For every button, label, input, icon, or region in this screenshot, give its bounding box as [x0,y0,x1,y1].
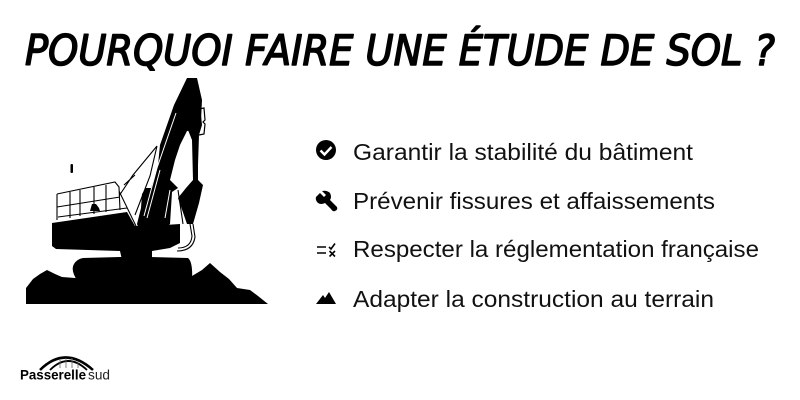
boom [137,78,202,232]
logo: Passerelle sud [20,358,110,382]
logo wordmark: sud [88,366,110,382]
icon: wrench [316,191,337,211]
cab guard rails [57,146,157,226]
icon: check circle [316,140,336,160]
turret body [52,212,180,260]
hydraulic hoses [177,190,195,251]
item 3: regulation: Respecter la réglementation française [353,236,759,262]
hinge plate [199,108,205,135]
icon: rule check and cross [317,244,335,256]
list of reasons [316,139,759,312]
dipper arm [178,105,203,224]
item 2: cracks: Prévenir fissures et affaissements [353,188,715,214]
item 1: stability: Garantir la stabilité du bâtiment [353,139,694,165]
item 4: terrain: Adapter la construction au terrain [353,286,714,312]
ground mound [26,263,268,304]
icon: mountains [316,292,336,304]
operator silhouette on deck [90,204,100,211]
crawler track [73,257,192,282]
illustration: excavator silhouette [26,78,268,304]
small mark [70,164,73,173]
logo wordmark: Passerelle [20,366,86,382]
logo bridge arch [40,358,93,370]
white highlight slits [144,113,176,218]
